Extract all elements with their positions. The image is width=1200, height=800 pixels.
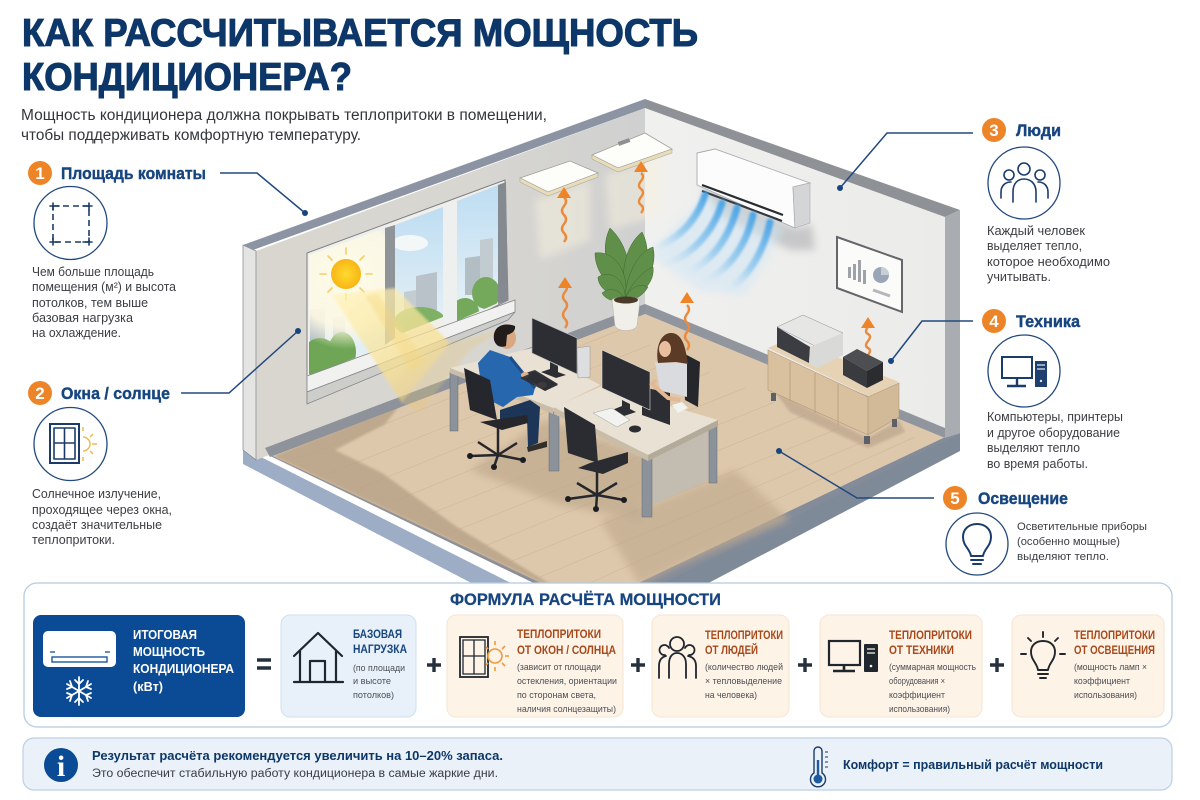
description 5 [1017,521,1147,563]
icon: room area [34,186,107,260]
icon: light bulb [946,513,1008,575]
base load text: потолков) [353,690,394,701]
base load text: (по площади [353,663,405,674]
air conditioner [697,149,815,250]
plus 1 [427,658,441,672]
description 2: Солнечное излучение, [32,487,161,501]
description 1: базовая нагрузка [32,311,133,325]
recommendation text [92,749,503,780]
callout 1: room area [28,161,308,340]
icon: house [294,633,343,682]
windows text: наличия солнцезащиты) [517,704,616,715]
icon: snowflake [67,677,91,705]
description 2 [32,487,172,547]
description 2: проходящее через окна, [32,503,172,517]
lighting text: ОТ ОСВЕЩЕНИЯ [1074,643,1155,657]
formula heading: ФОРМУЛА РАСЧЁТА МОЩНОСТИ [450,590,721,609]
number badge 2 [28,381,52,405]
description 4: Компьютеры, принтеры [987,410,1123,424]
base load text [353,627,407,701]
description 2: теплопритоки. [32,533,115,547]
description 4 [987,410,1123,471]
lighting text: ТЕПЛОПРИТОКИ [1074,628,1155,642]
computers on desks [522,318,688,432]
card: equipment [820,615,982,717]
card: base load [281,615,416,717]
leader line 2 [181,328,301,393]
floor [273,312,945,606]
lighting text: использования) [1074,690,1137,701]
equipment text: ОТ ТЕХНИКИ [889,643,954,657]
heat arrows [557,161,875,355]
base load text: НАГРУЗКА [353,642,407,656]
sun [320,248,372,300]
description 3 [987,224,1110,284]
people text: × тепловыделение [705,676,782,687]
printer and cabinet [768,315,905,448]
result text [133,627,235,694]
description 5: (особенно мощные) [1017,536,1120,548]
number badge 5 [943,486,967,510]
subtitle: чтобы поддерживать комфортную температуру. [21,127,361,144]
description 3: которое необходимо [987,255,1110,269]
description 4: выделяют тепло [987,441,1080,455]
windows text: по сторонам света, [517,690,596,701]
equals sign [257,660,271,668]
recommendation text: Результат расчёта рекомендуется увеличить на 10–20% запаса. [92,749,503,763]
plus 4 [990,658,1004,672]
people text [705,628,783,701]
icon: air conditioner [43,631,116,667]
card: people [652,615,789,717]
wall picture [837,237,902,312]
description 1: помещения (м²) и высота [32,280,176,294]
number badge 2: 2 [35,384,45,403]
leader line 5 [776,448,934,498]
recommendation text: Это обеспечит стабильную работу кондиционера в самые жаркие дни. [92,768,498,780]
leader line 4 [888,321,973,364]
title [22,12,698,99]
card: windows [447,615,623,717]
base load text: БАЗОВАЯ [353,627,402,641]
icon: info: i [57,750,65,783]
title: КАК РАССЧИТЫВАЕТСЯ МОЩНОСТЬ [22,12,698,55]
icon: window and sun [34,408,107,480]
man on chair [464,325,558,470]
panel: recommendation bar [23,738,1172,790]
subtitle: Мощность кондиционера должна покрывать теплопритоки в помещении, [21,107,547,124]
result text: ИТОГОВАЯ [133,627,197,642]
icon: people [659,637,696,678]
result text: КОНДИЦИОНЕРА [133,661,235,676]
left wall [243,99,645,460]
subtitle [21,107,547,144]
description 3: учитывать. [987,270,1051,284]
woman at desk [652,333,700,407]
ceiling lights [520,133,672,260]
number badge 4: 4 [989,312,999,331]
description 1: на охлаждение. [32,326,121,340]
windows text: ОТ ОКОН / СОЛНЦА [517,643,616,657]
heading 4: Техника [1016,312,1081,331]
description 3: Каждый человек [987,224,1086,238]
sunlight beams [332,288,500,412]
front chair [564,407,628,512]
heading 1: Площадь комнаты [61,164,206,183]
window with sun [302,180,515,404]
windows text [517,627,617,715]
number badge 1 [28,161,52,185]
leader line 3 [837,133,973,191]
number badge 4 [982,309,1006,333]
desks [450,348,718,517]
base load text: и высоте [353,676,391,687]
number badge 5: 5 [950,489,960,508]
icon: people [988,147,1060,219]
cold airflow [650,195,785,295]
callout 4: equipment [888,309,1123,471]
description 5: Осветительные приборы [1017,521,1147,533]
description 1: потолков, тем выше [32,296,148,310]
panel: formula [24,583,1172,727]
leader line 1 [220,173,308,216]
plus 2 [631,658,645,672]
windows text: (зависит от площади [517,662,601,673]
description 1 [32,265,176,340]
title: КОНДИЦИОНЕРА? [22,56,352,99]
equipment text: (суммарная мощность [889,662,976,673]
icon: thermometer [811,747,828,787]
description 3: выделяет тепло, [987,239,1082,253]
description 2: создаёт значительные [32,518,162,532]
number badge 3: 3 [989,121,999,140]
equipment text: коэффициент [889,690,946,701]
icon: light bulb [1021,632,1065,678]
description 4: и другое оборудование [987,426,1120,440]
people text: ТЕПЛОПРИТОКИ [705,628,783,642]
heading 2: Окна / солнце [61,384,170,403]
number badge 3 [982,118,1006,142]
icon: computer [988,335,1060,407]
icon: window and sun [460,637,509,677]
icon: info [44,748,78,783]
room illustration [242,99,960,582]
people text: на человека) [705,690,757,701]
lighting text: (мощность ламп × [1074,662,1147,673]
heading 3: Люди [1016,121,1061,140]
windows text: ТЕПЛОПРИТОКИ [517,627,601,641]
equipment text: использования) [889,704,950,715]
room base [243,433,960,650]
lighting text [1074,628,1155,701]
people text: ОТ ЛЮДЕЙ [705,642,758,657]
callout 3: people [837,118,1110,284]
description 4: во время работы. [987,457,1088,471]
card: lighting [1012,615,1164,717]
callout 5: lighting [776,448,1147,575]
plant [595,228,654,330]
result text: МОЩНОСТЬ [133,644,205,659]
result card [33,615,245,717]
right wall [645,99,960,438]
result text: (кВт) [133,679,163,694]
equipment text [889,628,976,715]
plus 3 [798,658,812,672]
equipment text: ТЕПЛОПРИТОКИ [889,628,972,642]
description 5: выделяют тепло. [1017,551,1109,563]
icon: computer [829,641,878,672]
equipment text: оборудования × [889,676,945,687]
description 1: Чем больше площадь [32,265,154,279]
windows text: остекления, ориентации [517,676,617,687]
comfort slogan: Комфорт = правильный расчёт мощности [843,758,1103,772]
heading 5: Освещение [978,489,1068,508]
number badge 1: 1 [35,164,45,183]
people text: (количество людей [705,662,783,673]
callout 2: windows and sun [28,328,301,547]
lighting text: коэффициент [1074,676,1131,687]
